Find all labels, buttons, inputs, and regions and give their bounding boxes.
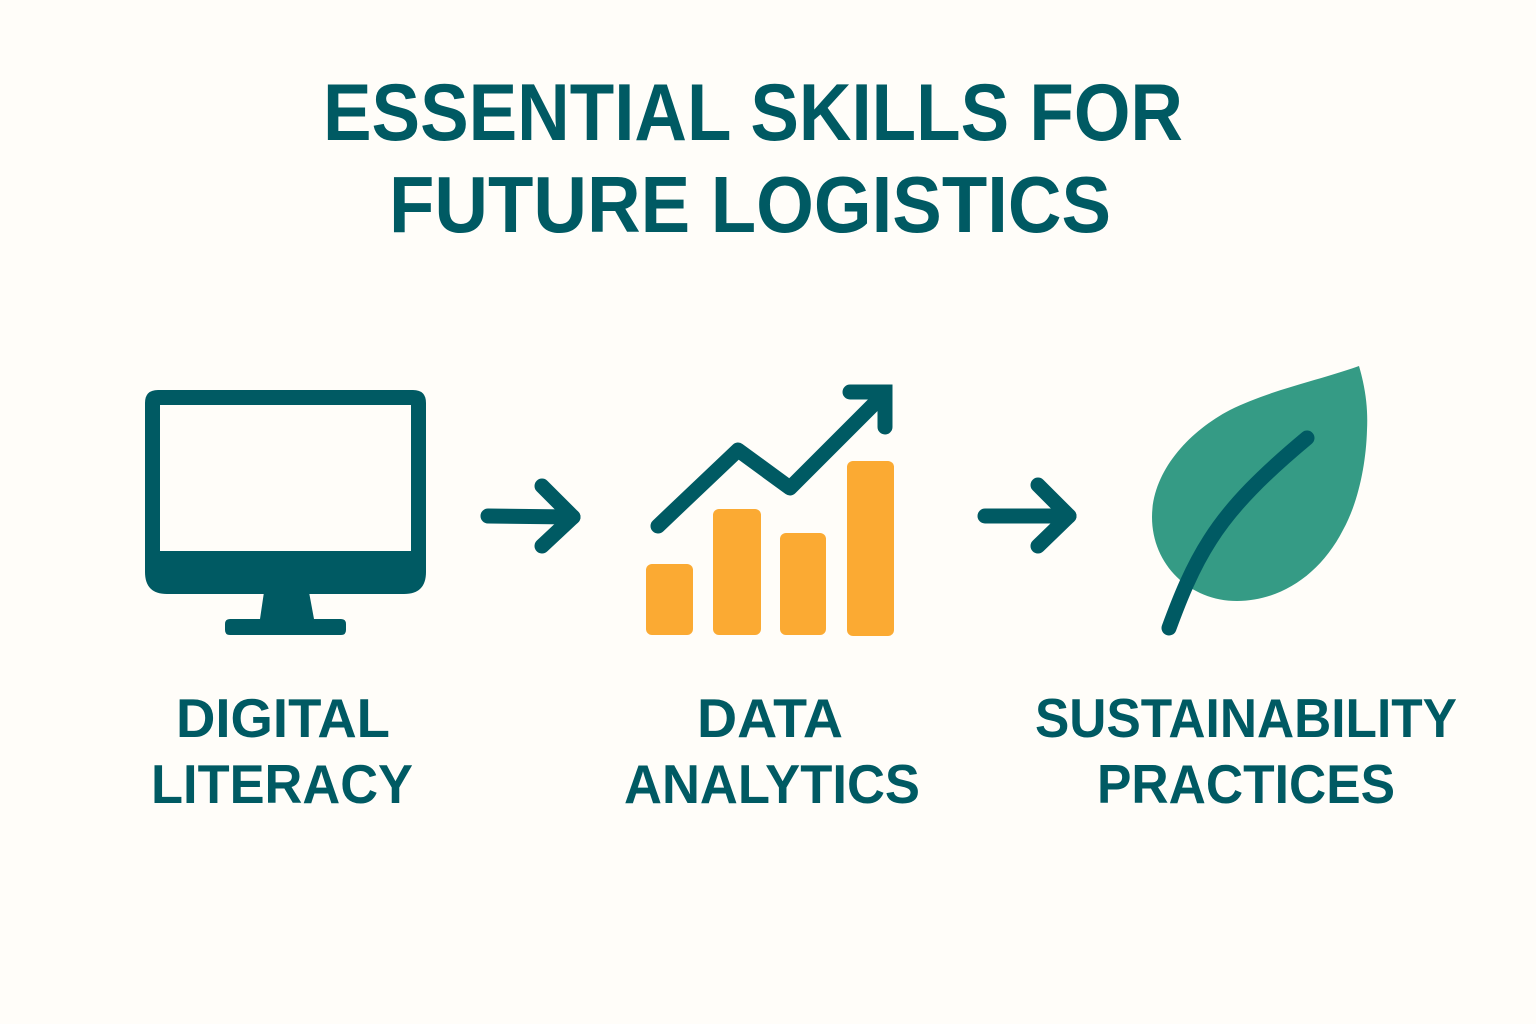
label: digital literacy xyxy=(151,687,413,815)
label: digital literacy: DIGITAL xyxy=(176,687,390,749)
title: ESSENTIAL SKILLS FOR xyxy=(323,68,1183,158)
bar 3 xyxy=(780,533,826,635)
label: data analytics: ANALYTICS xyxy=(624,753,920,815)
label: sustainability practices: SUSTAINABILITY xyxy=(1035,687,1457,749)
icon: leaf xyxy=(1152,366,1367,628)
arrow: digital literacy to data analytics xyxy=(488,486,573,546)
bar 4 xyxy=(847,461,894,636)
icon: computer monitor xyxy=(145,390,426,635)
label: data analytics xyxy=(624,687,920,815)
title: FUTURE LOGISTICS xyxy=(389,160,1111,249)
icon: data analytics chart xyxy=(646,392,894,636)
title xyxy=(323,68,1183,249)
label: sustainability practices: PRACTICES xyxy=(1097,753,1395,815)
label: data analytics: DATA xyxy=(697,687,843,749)
bar 2 xyxy=(713,509,761,635)
arrow: data analytics to sustainability xyxy=(985,485,1069,546)
label: digital literacy: LITERACY xyxy=(151,753,413,815)
bar 1 xyxy=(646,564,693,635)
trend arrow xyxy=(658,392,885,526)
label: sustainability practices xyxy=(1035,687,1457,815)
